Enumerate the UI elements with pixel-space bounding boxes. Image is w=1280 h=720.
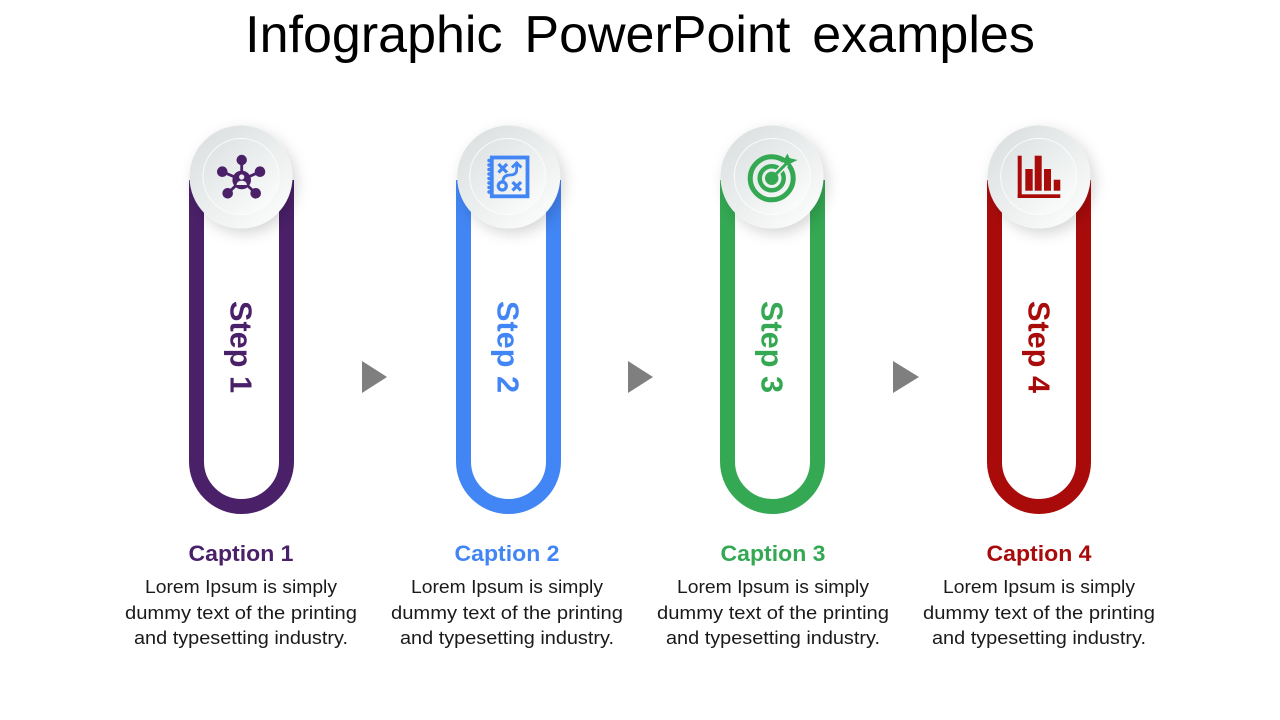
caption block 1: dummy text of the printing <box>125 603 357 623</box>
icon: network <box>217 155 265 199</box>
title: Infographic PowerPoint examples <box>245 6 1035 64</box>
pill: step 3 <box>728 180 818 507</box>
icon: strategy board <box>489 158 528 196</box>
caption block 3: and typesetting industry. <box>666 628 880 648</box>
caption block 4: and typesetting industry. <box>932 628 1146 648</box>
caption block 4: Caption 4 <box>986 541 1092 566</box>
caption block 1: Lorem Ipsum is simply <box>145 577 337 597</box>
label: step 4: Step 4 <box>1022 301 1056 393</box>
pill: step 1 <box>196 180 286 507</box>
caption block 2 <box>391 541 623 648</box>
pill: step 2 <box>464 180 554 507</box>
caption block 4: dummy text of the printing <box>923 603 1155 623</box>
icon: bar chart <box>1018 156 1060 198</box>
icon: target <box>750 154 798 200</box>
panel: step 2 <box>457 126 560 507</box>
badge: step 1 <box>190 126 292 228</box>
caption block 1: Caption 1 <box>188 541 294 566</box>
badge: step 4 <box>988 126 1090 228</box>
panel: step 3 <box>720 126 824 507</box>
badge: step 3 <box>720 126 824 228</box>
label: step 3: Step 3 <box>754 301 788 393</box>
label: step 1: Step 1 <box>224 301 258 393</box>
panel: step 4 <box>988 126 1090 507</box>
badge: step 2 <box>457 126 560 228</box>
caption block 4: Lorem Ipsum is simply <box>943 577 1135 597</box>
panel: step 1 <box>190 126 292 507</box>
caption block 1: and typesetting industry. <box>134 628 348 648</box>
caption block 2: Lorem Ipsum is simply <box>411 577 603 597</box>
caption block 3 <box>657 541 889 648</box>
caption block 2: dummy text of the printing <box>391 603 623 623</box>
caption block 2: and typesetting industry. <box>400 628 614 648</box>
pill: step 4 <box>994 180 1084 507</box>
caption block 2: Caption 2 <box>454 541 560 566</box>
caption block 3: Caption 3 <box>720 541 826 566</box>
arrow: step 2 to 3 <box>628 361 653 393</box>
label: step 2: Step 2 <box>490 301 524 393</box>
arrow: step 3 to 4 <box>893 361 919 393</box>
caption block 4 <box>923 541 1155 648</box>
arrow: step 1 to 2 <box>362 361 387 393</box>
caption block 3: dummy text of the printing <box>657 603 889 623</box>
caption block 1 <box>125 541 357 648</box>
caption block 3: Lorem Ipsum is simply <box>677 577 869 597</box>
